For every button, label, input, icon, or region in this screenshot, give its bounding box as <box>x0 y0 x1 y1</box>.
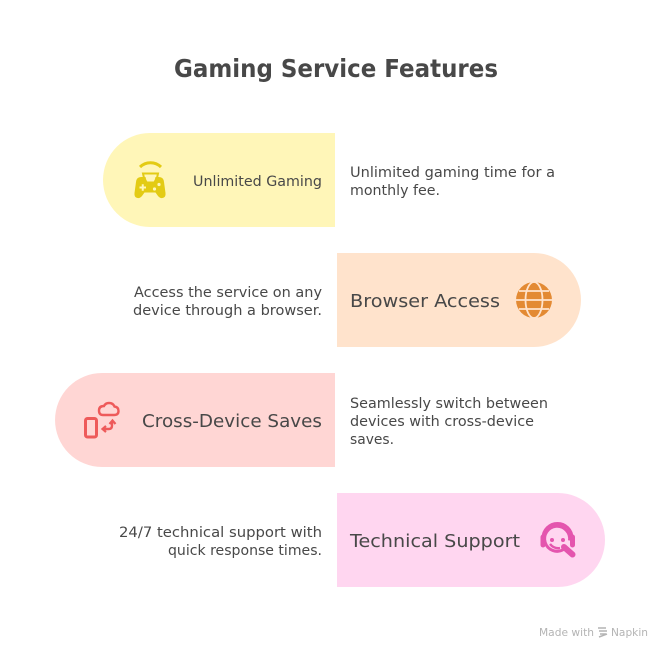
watermark: made with napkin: Made with <box>539 626 594 639</box>
description: technical support <box>119 525 322 559</box>
panel: browser access <box>337 253 581 347</box>
icon: game controller with wifi <box>134 163 166 198</box>
label: browser access: Browser Access <box>350 291 500 312</box>
watermark: made with napkin <box>539 626 648 639</box>
icon: phone and cloud sync <box>86 403 118 437</box>
label: technical support: Technical Support <box>349 531 520 552</box>
panel: technical support <box>337 493 605 587</box>
panel: unlimited gaming <box>103 133 335 227</box>
description: cross-device saves: devices with cross-device <box>350 414 534 430</box>
pill: cross-device saves <box>55 373 335 467</box>
description: cross-device saves: saves. <box>350 432 394 448</box>
description: technical support: 24/7 technical support with <box>119 525 322 541</box>
panel: cross-device saves <box>55 373 335 467</box>
description: unlimited gaming: Unlimited gaming time for a <box>350 165 555 181</box>
description: browser access: Access the service on any <box>134 285 322 301</box>
pill: browser access <box>337 253 581 347</box>
watermark: made with napkin: Napkin <box>611 626 648 639</box>
description: unlimited gaming: monthly fee. <box>350 183 440 199</box>
description: cross-device saves <box>350 396 548 448</box>
pill: unlimited gaming <box>103 133 335 227</box>
icon: globe <box>516 282 552 318</box>
description: cross-device saves: Seamlessly switch between <box>350 396 548 412</box>
icon: napkin logo <box>598 628 607 637</box>
description: browser access: device through a browser. <box>133 303 322 319</box>
label: cross-device saves: Cross-Device Saves <box>142 411 322 432</box>
description: unlimited gaming <box>350 165 555 199</box>
pill: technical support <box>337 493 605 587</box>
icon: support agent with headset <box>540 524 575 554</box>
description: browser access <box>133 285 322 319</box>
description: technical support: quick response times. <box>168 543 322 559</box>
label: unlimited gaming: Unlimited Gaming <box>193 174 322 190</box>
title: Gaming Service Features <box>174 54 498 83</box>
